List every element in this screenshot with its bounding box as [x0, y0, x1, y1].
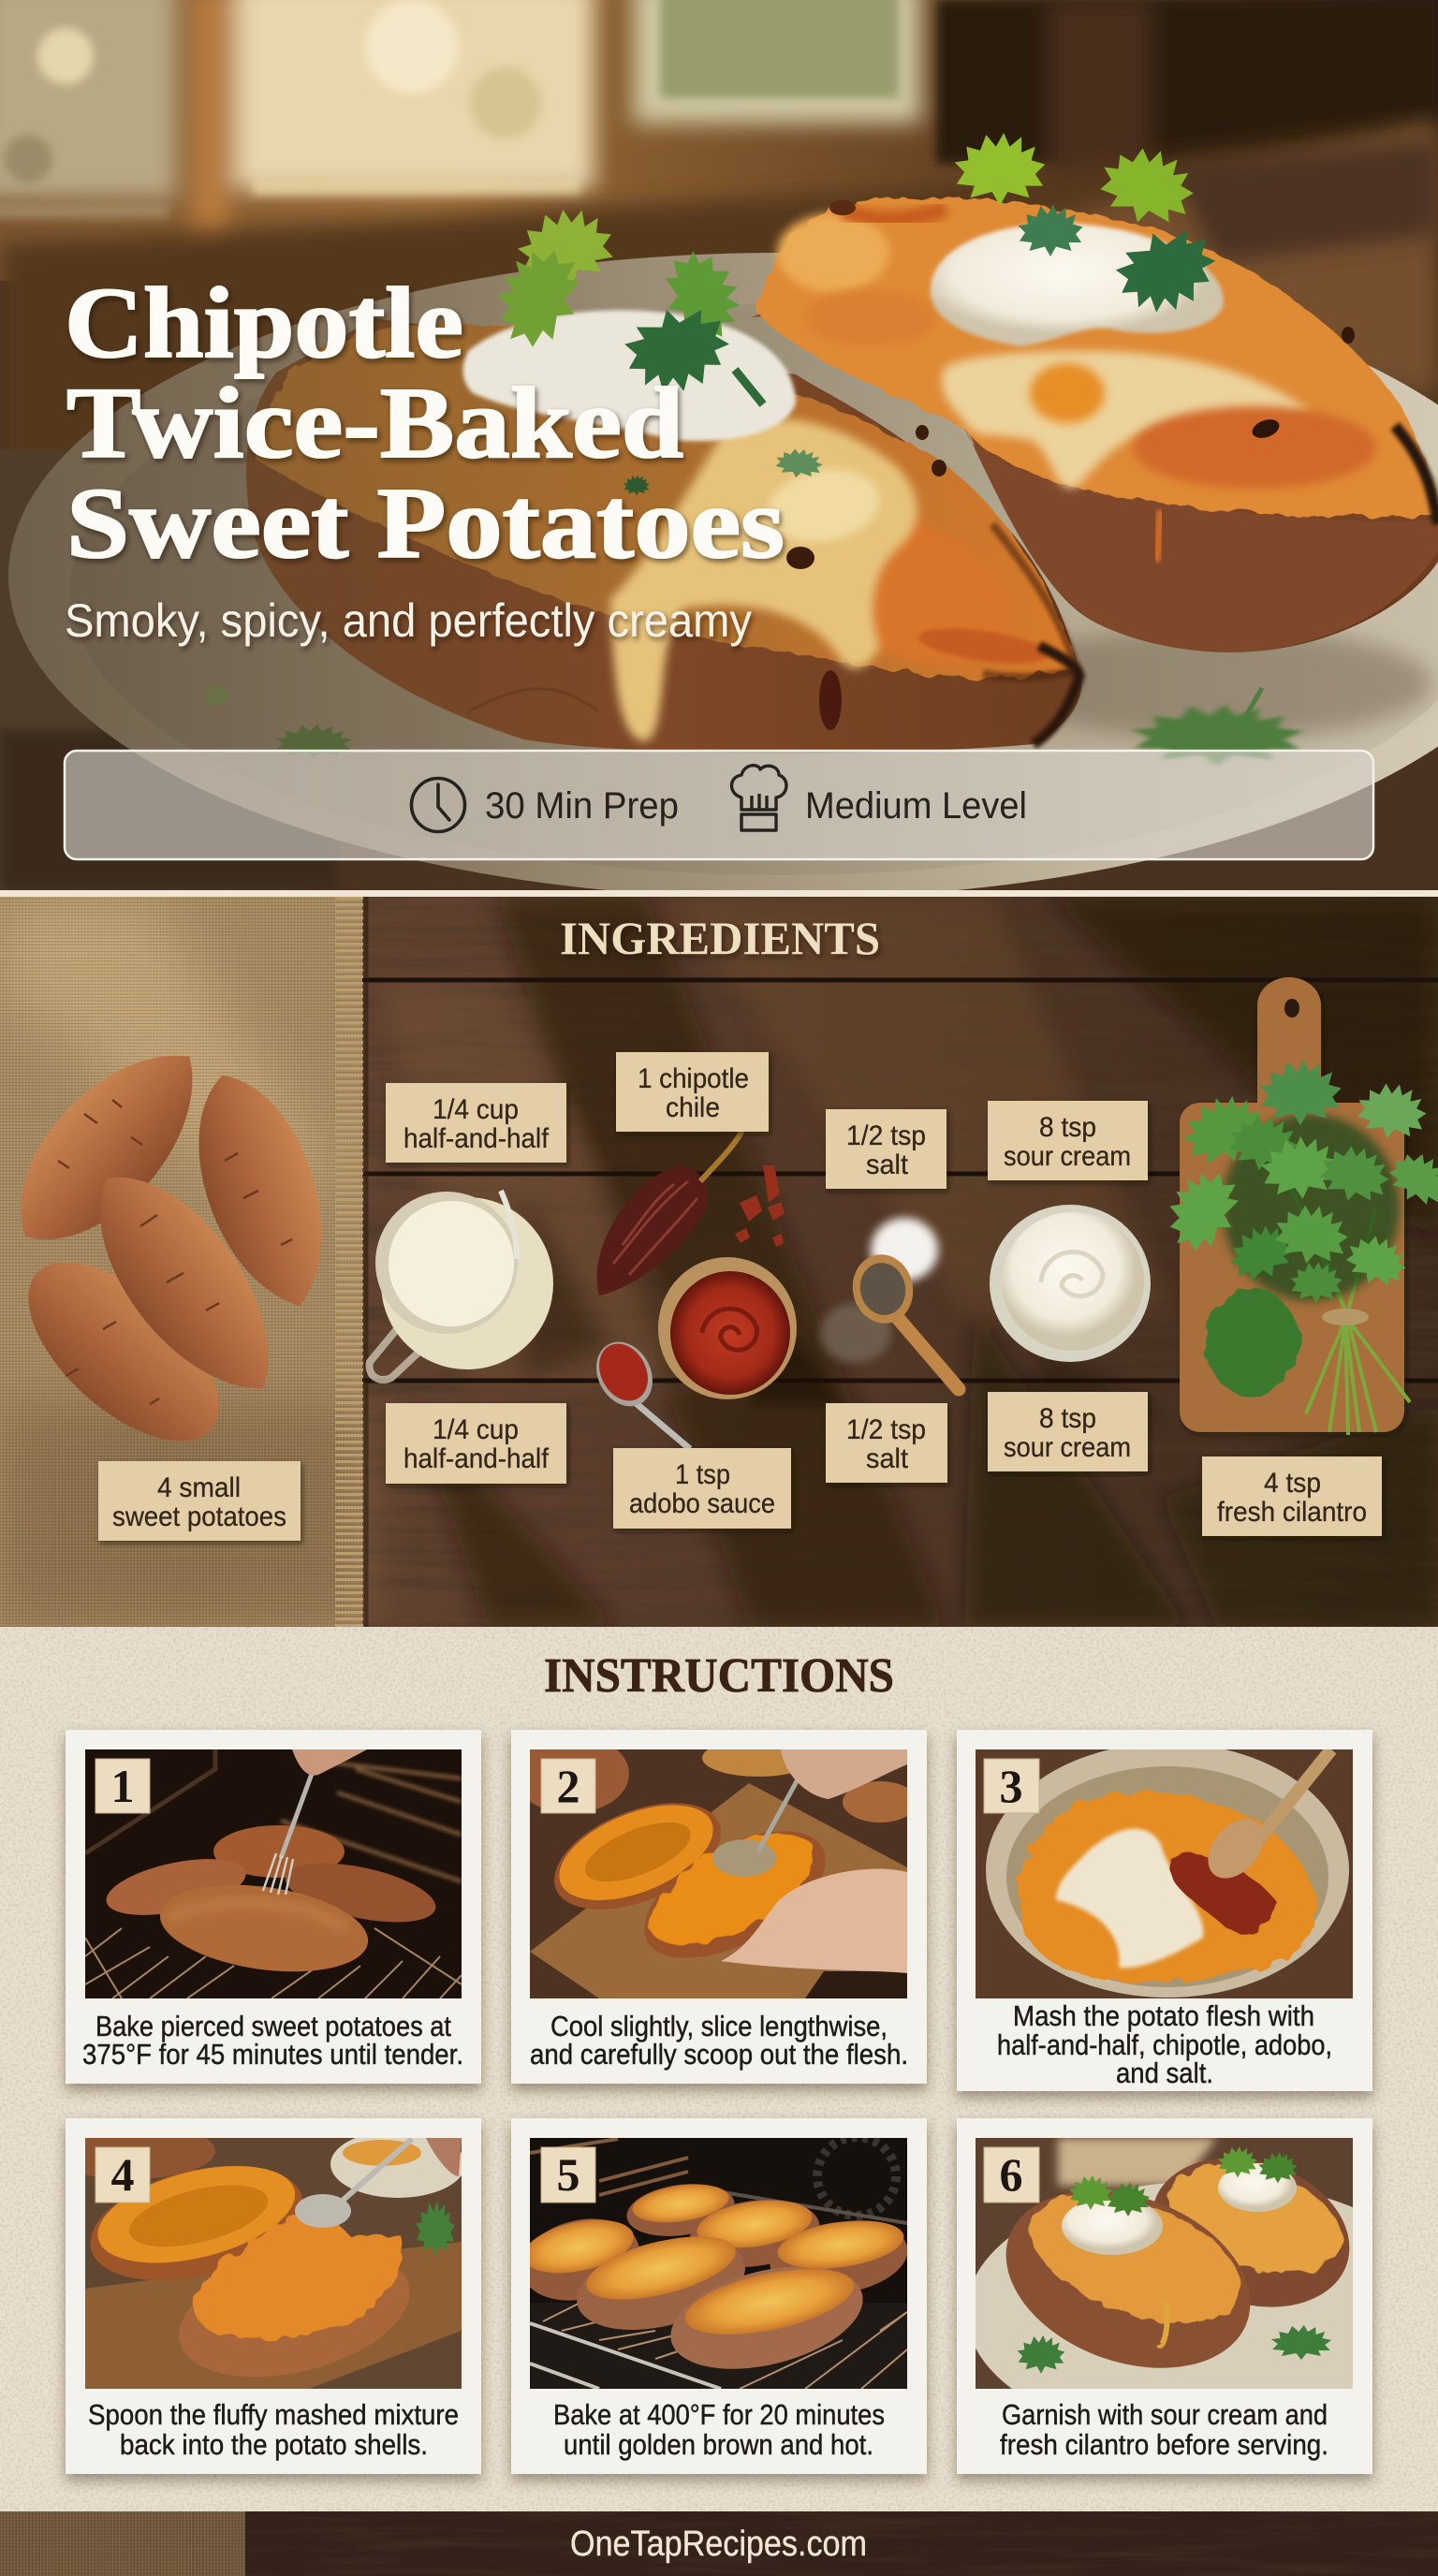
step text — [553, 2398, 885, 2461]
title: Chipotle — [65, 268, 463, 379]
label: adobo sauce — [629, 1459, 775, 1519]
label: salt bottom: salt — [866, 1443, 909, 1474]
step number badge: 2 — [556, 1760, 580, 1812]
label: fresh cilantro: 4 tsp — [1264, 1468, 1321, 1499]
panel: instructions — [0, 1627, 1438, 2511]
label: salt bottom — [846, 1414, 926, 1474]
label: salt top: 1/2 tsp — [846, 1120, 926, 1151]
step number badge: 6 — [1000, 2148, 1022, 2201]
step number badge: 5 — [556, 2148, 580, 2201]
step card 4 — [47, 2118, 481, 2474]
label: sour cream bottom: sour cream — [1004, 1432, 1131, 1463]
info bar — [65, 751, 1373, 859]
step number badge — [95, 2147, 150, 2203]
title: Twice-Baked — [66, 368, 683, 479]
step text: Bake at 400°F for 20 minutes — [553, 2398, 885, 2431]
label: half-and-half top — [404, 1094, 550, 1154]
label: adobo sauce: 1 tsp — [675, 1459, 730, 1490]
step text: Bake pierced sweet potatoes at — [95, 2010, 451, 2042]
step text — [82, 2010, 463, 2071]
photo: plate — [8, 253, 1438, 899]
step text: Cool slightly, slice lengthwise, — [550, 2010, 888, 2042]
label: fresh cilantro — [1217, 1468, 1367, 1528]
label: sour cream bottom: 8 tsp — [1039, 1403, 1096, 1434]
label: sweet potatoes — [112, 1472, 286, 1532]
photo: back potato — [749, 198, 1438, 652]
panel: hero — [0, 0, 1438, 899]
illustration: salt and pepper with wooden spoon — [820, 1218, 959, 1389]
photo: scooping flesh from potato — [513, 1734, 917, 1998]
photo: back sour cream and cilantro — [931, 133, 1226, 346]
label: half-and-half bottom: 1/4 cup — [433, 1414, 519, 1445]
photo: plate garnish — [202, 683, 1303, 767]
step text: Mash the potato flesh with — [1013, 1999, 1314, 2032]
label: salt top: salt — [866, 1149, 909, 1180]
label: half-and-half top: 1/4 cup — [433, 1094, 519, 1125]
step text: and salt. — [1116, 2056, 1213, 2089]
paper background — [0, 1627, 1438, 2511]
icon: clock — [412, 779, 464, 831]
heading: instructions: INSTRUCTIONS — [544, 1649, 894, 1703]
step text — [530, 2010, 908, 2071]
step text: Garnish with sour cream and — [1002, 2398, 1328, 2431]
step text: half-and-half, chipotle, adobo, — [997, 2028, 1332, 2061]
heading: ingredients: INGREDIENTS — [560, 912, 880, 964]
title — [65, 268, 785, 579]
step text — [1000, 2398, 1328, 2461]
photo: baked potatoes on oven rack — [513, 2137, 913, 2389]
ingredient labels — [98, 1052, 1382, 1541]
label: chipotle chile — [638, 1063, 749, 1123]
label: sour cream top — [1004, 1112, 1131, 1172]
label: sour cream top: 8 tsp — [1039, 1112, 1096, 1143]
step text — [997, 1999, 1332, 2089]
label: salt top — [846, 1120, 926, 1180]
step number badge — [984, 1759, 1039, 1813]
label: sweet potatoes: sweet potatoes — [112, 1501, 286, 1532]
photo: front sour cream and cilantro — [463, 202, 826, 496]
website: OneTapRecipes.com — [570, 2525, 867, 2564]
step number badge: 4 — [110, 2148, 135, 2201]
label: half-and-half top: half-and-half — [404, 1123, 550, 1154]
label: salt bottom: 1/2 tsp — [846, 1414, 926, 1445]
step number badge — [984, 2147, 1039, 2203]
difficulty level: Medium Level — [805, 785, 1027, 827]
label: sour cream top: sour cream — [1004, 1141, 1131, 1172]
photo: potatoes pierced in oven — [85, 1749, 462, 1998]
step card 3 — [957, 1730, 1372, 2091]
step number badge — [95, 1759, 150, 1813]
step text: fresh cilantro before serving. — [1000, 2428, 1328, 2461]
burlap cloth — [0, 897, 366, 1627]
panel: ingredients — [0, 897, 1438, 1627]
wood table background — [356, 897, 1438, 1627]
label: half-and-half bottom: half-and-half — [404, 1443, 550, 1474]
footer — [0, 2511, 1438, 2576]
step text: and carefully scoop out the flesh. — [530, 2038, 908, 2071]
title: Sweet Potatoes — [66, 468, 785, 579]
illustration: sweet potatoes — [0, 1020, 350, 1473]
illustration: half-and-half pitcher — [370, 1191, 609, 1380]
step card 1 — [66, 1730, 481, 2084]
label: chipotle chile: 1 chipotle — [638, 1063, 749, 1094]
step number badge: 1 — [110, 1760, 135, 1812]
illustration: cutting board with cilantro — [1154, 977, 1438, 1435]
label: half-and-half bottom — [404, 1414, 550, 1474]
illustration: adobo sauce bowl — [658, 1257, 843, 1404]
step card 5 — [511, 2118, 927, 2474]
label: fresh cilantro: fresh cilantro — [1217, 1497, 1367, 1528]
illustration: chipotle chile — [596, 1117, 785, 1295]
step number badge — [541, 2147, 595, 2203]
step text: 375°F for 45 minutes until tender. — [82, 2038, 463, 2071]
photo: front potato — [246, 318, 1081, 754]
step text: Spoon the fluffy mashed mixture — [88, 2398, 459, 2431]
illustration: spoon of adobo — [585, 1332, 690, 1449]
step text: until golden brown and hot. — [564, 2428, 873, 2461]
step text: back into the potato shells. — [120, 2428, 428, 2461]
photo: spooning mixture into shells — [47, 2123, 465, 2399]
step text — [88, 2398, 459, 2461]
section divider — [0, 890, 1438, 897]
label: adobo sauce: adobo sauce — [629, 1488, 775, 1519]
photo: window and kitchen background — [0, 0, 1438, 890]
icon: chef hat — [732, 766, 786, 830]
step number badge: 3 — [1000, 1760, 1022, 1812]
label: sour cream bottom — [1004, 1403, 1131, 1463]
illustration: sour cream jar — [990, 1205, 1180, 1423]
step card 6 — [957, 2118, 1438, 2474]
step card 2 — [511, 1730, 927, 2084]
subtitle: Smoky, spicy, and perfectly creamy — [65, 594, 752, 647]
step number badge — [541, 1759, 595, 1813]
label: chipotle chile: chile — [666, 1092, 720, 1123]
photo: garnished potatoes on plate — [966, 2133, 1438, 2443]
label: sweet potatoes: 4 small — [157, 1472, 241, 1503]
photo: mashing with chipotle — [976, 1743, 1353, 1998]
prep time: 30 Min Prep — [485, 785, 679, 827]
